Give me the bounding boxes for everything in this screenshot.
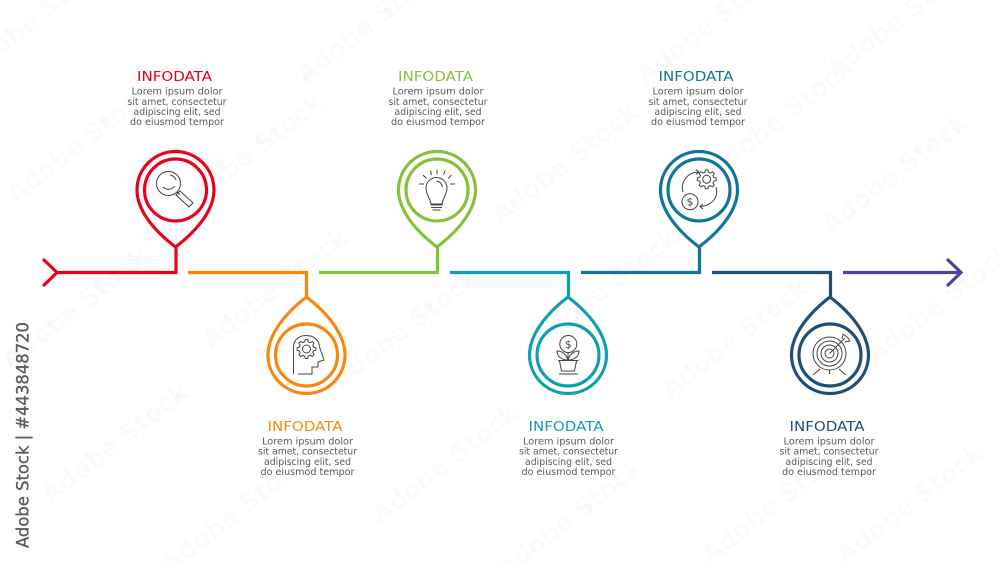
text: Adobe Stock (366, 397, 524, 529)
text block teal: sit amet, consectetur (519, 447, 618, 458)
step 4: teal plant pin (450, 272, 618, 478)
text block red: adipiscing elit, sed (134, 107, 221, 118)
text block orange: adipiscing elit, sed (264, 457, 351, 468)
text: Adobe Stock (1, 77, 159, 209)
text: Adobe Stock (701, 52, 859, 184)
text block orange: sit amet, consectetur (258, 447, 357, 458)
timeline segment red with tail (43, 247, 176, 286)
text: Adobe Stock (526, 222, 684, 354)
icon: coin plant: $ (565, 338, 572, 351)
text: Adobe Stock (656, 272, 814, 404)
step 6: navy target pin (712, 272, 879, 478)
heading red: INFODATA (137, 69, 213, 85)
icon: magnifying glass (156, 172, 193, 207)
text: Adobe Stock (486, 97, 644, 229)
arrow: purple timeline end (843, 259, 961, 286)
drop navy (792, 297, 868, 394)
timeline segment orange (188, 272, 306, 298)
text block green: do eiusmod tempor (391, 117, 485, 128)
text block blue: adipiscing elit, sed (654, 107, 742, 118)
text: Adobe Stock (326, 262, 484, 394)
text block teal: do eiusmod tempor (522, 467, 616, 478)
text block teal: adipiscing elit, sed (525, 457, 612, 468)
text block red: Lorem ipsum dolor (132, 87, 223, 98)
text block orange (258, 436, 357, 478)
heading blue: INFODATA (658, 69, 734, 85)
text block green: sit amet, consectetur (388, 97, 488, 108)
pin blue (660, 152, 738, 247)
heading orange: INFODATA (268, 419, 343, 435)
icon: gear and dollar cycle: $ (686, 196, 694, 209)
text block orange: do eiusmod tempor (260, 467, 355, 478)
icon: light bulb (419, 170, 455, 210)
text block navy: Lorem ipsum dolor (784, 436, 875, 448)
text block navy: do eiusmod tempor (782, 467, 876, 478)
heading teal: INFODATA (528, 419, 604, 435)
text block green (388, 87, 488, 128)
timeline segment green (319, 247, 438, 272)
text block green: Lorem ipsum dolor (392, 87, 484, 98)
icon: head with gear (294, 336, 324, 374)
text: Adobe Stock (36, 377, 194, 509)
icon: gear and dollar cycle (682, 170, 717, 210)
text block red (128, 87, 227, 128)
pin red (137, 152, 214, 247)
text block green: adipiscing elit, sed (394, 107, 482, 118)
stock id label: Adobe Stock | #443848720 (14, 322, 34, 548)
text block blue (648, 87, 748, 128)
step 5: blue money cycle pin (581, 69, 748, 272)
text block teal (519, 436, 618, 478)
text block blue: sit amet, consectetur (648, 97, 748, 108)
timeline segment navy (712, 272, 830, 298)
text block blue: do eiusmod tempor (651, 117, 745, 128)
heading navy: INFODATA (790, 419, 865, 435)
text: Adobe Stock (0, 242, 154, 374)
icon: target with arrow (813, 334, 850, 375)
drop orange (268, 297, 345, 393)
icon: coin plant (557, 336, 579, 374)
text: Adobe Stock (196, 222, 354, 354)
text block navy: sit amet, consectetur (780, 447, 879, 458)
step 3: green bulb pin (319, 69, 488, 272)
timeline segment teal (450, 272, 568, 298)
drop teal (530, 297, 606, 394)
text block orange: Lorem ipsum dolor (262, 436, 353, 448)
heading green: INFODATA (398, 69, 474, 85)
text: Adobe Stock (816, 107, 974, 239)
pin green (398, 152, 476, 247)
text block red: do eiusmod tempor (130, 117, 224, 128)
text block red: sit amet, consectetur (128, 97, 227, 108)
text block blue: Lorem ipsum dolor (652, 87, 744, 98)
step 2: orange head pin (188, 272, 357, 478)
step 1: red search pin (43, 69, 227, 286)
timeline segment blue (581, 247, 700, 272)
text: Adobe Stock (171, 87, 329, 219)
text block navy (780, 436, 879, 478)
text block navy: adipiscing elit, sed (786, 457, 873, 468)
text block teal: Lorem ipsum dolor (523, 436, 614, 448)
